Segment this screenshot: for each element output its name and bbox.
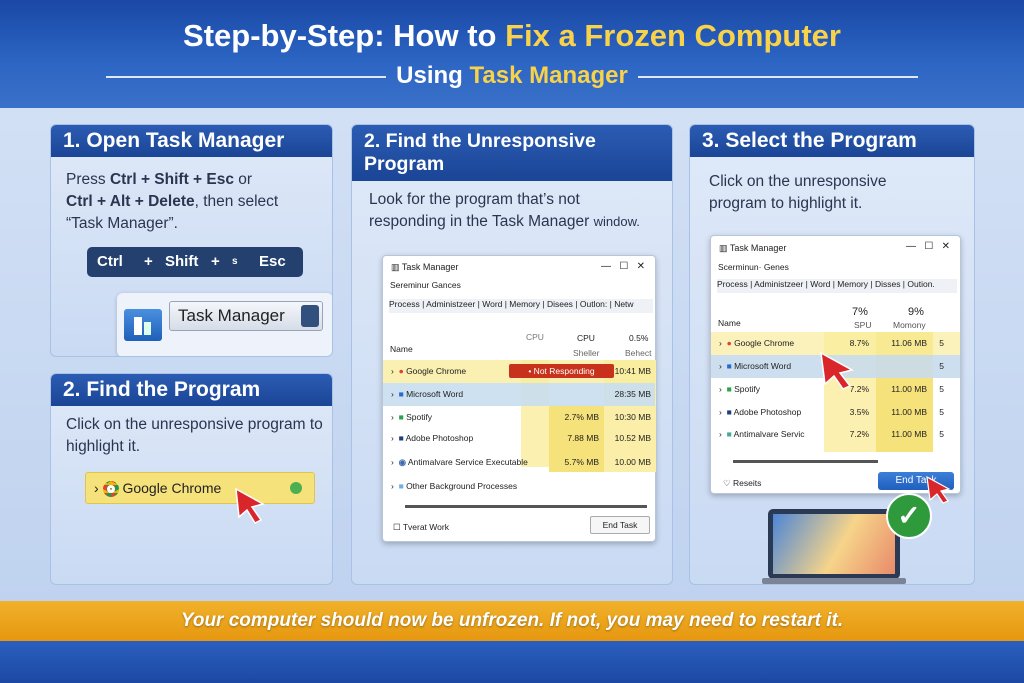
heading 2: 2. Find the Program <box>63 378 260 401</box>
task manager window 2: 7.2% <box>850 429 869 439</box>
task manager window 2: › ■ Antimalvare Servic <box>719 429 804 439</box>
icon: check <box>886 493 932 539</box>
task manager window: Process | Administzeer | Word | Memory | Disees | Outlon: | Netw <box>389 299 634 309</box>
text 1: Ctrl + Alt + Delete, then select <box>66 193 278 210</box>
task manager window 2: 11.00 MB <box>891 429 927 439</box>
task manager window 2: Scerminun· Genes <box>718 262 789 272</box>
task manager window 2: 5 <box>939 429 944 439</box>
task manager window: 10.52 MB <box>615 433 651 443</box>
task manager window 2: 11.00 MB <box>891 407 927 417</box>
task manager window: 10:30 MB <box>615 412 651 422</box>
task manager window: Sereminur Gances <box>390 280 461 290</box>
heading 3: 2. Find the Unresponsive <box>364 130 596 152</box>
bottom band <box>0 641 1024 683</box>
text 1: Press Ctrl + Shift + Esc or <box>66 171 252 188</box>
task manager window: › ● Google Chrome <box>391 366 466 376</box>
icon: check: ✓ <box>897 500 921 531</box>
arrow cursor <box>235 488 265 524</box>
task manager window 2: 9% <box>908 306 924 318</box>
text 2: Click on the unresponsive program to highlight it. <box>66 416 323 455</box>
task manager window 2: ▥ Task Manager <box>719 243 786 253</box>
task manager window 2: 5 <box>939 338 944 348</box>
task manager window: 0.5% <box>629 333 648 343</box>
task manager window: › ■ Spotify <box>391 412 432 422</box>
text 1 <box>66 171 278 232</box>
task manager window 2: — ☐ ✕ <box>906 241 950 252</box>
task manager window: CPU <box>577 333 595 343</box>
keyboard shortcut keys <box>87 247 303 277</box>
heading 1: 1. Open Task Manager <box>63 129 284 152</box>
icon: task manager <box>124 309 162 341</box>
task manager window 2: 5 <box>939 384 944 394</box>
task manager window: 10:41 MB <box>615 366 651 376</box>
heading 2 <box>51 374 332 406</box>
task manager window 2: Name <box>718 318 741 328</box>
task manager window: CPU <box>526 332 544 342</box>
cursor arrows <box>820 352 854 390</box>
task manager window: 7.88 MB <box>567 433 599 443</box>
task manager window: › ■ Other Background Processes <box>391 481 517 491</box>
task manager window 2: ♡ Reseits <box>723 478 761 488</box>
keyboard shortcut keys: + <box>211 253 220 270</box>
task manager window <box>382 255 656 542</box>
text 1: “Task Manager”. <box>66 215 178 232</box>
task manager window 2: Process | Administzeer | Word | Memory | Disses | Oution. <box>717 279 935 289</box>
task manager window: Name <box>390 344 413 354</box>
task manager window: › ◉ Antimalvare Service Executable <box>391 457 528 467</box>
task manager window 2: Momony <box>893 320 926 330</box>
task manager window 2: 3.5% <box>850 407 869 417</box>
keyboard shortcut keys: s <box>232 256 238 267</box>
task manager window: 10.00 MB <box>615 457 651 467</box>
task manager selection callout <box>117 293 333 357</box>
task manager window: — ☐ ✕ <box>601 261 645 272</box>
task manager window: › ■ Microsoft Word <box>391 389 463 399</box>
task manager window: Behect <box>625 348 651 358</box>
heading 4 <box>690 125 974 157</box>
task manager window 2: 7.2% <box>850 384 869 394</box>
dropdown: Task Manager <box>178 306 285 325</box>
task manager window 2: 5 <box>939 407 944 417</box>
panel: find the program <box>50 373 333 585</box>
title: Step-by-Step: How to Fix a Frozen Computer <box>183 18 841 53</box>
task manager window: 28:35 MB <box>615 389 651 399</box>
task manager window 2: 11.00 MB <box>891 384 927 394</box>
task manager window 2: 11.06 MB <box>891 338 927 348</box>
task manager window 2: 8.7% <box>850 338 869 348</box>
task manager window 2: SPU <box>854 320 871 330</box>
text 3: Look for the program that’s not responding in the Task Manager window. <box>369 191 640 230</box>
task manager window 2: › ■ Adobe Photoshop <box>719 407 801 417</box>
task manager window 2: › ■ Microsoft Word <box>719 361 791 371</box>
footer banner <box>0 601 1024 641</box>
panel: select the program <box>689 124 975 585</box>
task manager window: ☐ Tverat Work <box>393 522 449 532</box>
task manager window: › ■ Adobe Photoshop <box>391 433 473 443</box>
task manager window 2 <box>710 235 961 494</box>
panel: find unresponsive program <box>351 124 673 585</box>
keyboard shortcut keys: Ctrl <box>97 253 123 270</box>
task manager window 2: End Task <box>896 475 936 486</box>
task manager window: Sheller <box>573 348 599 358</box>
subtitle: Using Task Manager <box>396 62 628 89</box>
task manager window 2: › ● Google Chrome <box>719 338 794 348</box>
keyboard shortcut keys: Esc <box>259 253 286 270</box>
task manager window 2: 5 <box>939 361 944 371</box>
heading 3 <box>352 125 672 181</box>
task manager window 2: › ■ Spotify <box>719 384 760 394</box>
dropdown <box>169 301 323 331</box>
task manager window 2: 7% <box>852 306 868 318</box>
header band <box>0 0 1024 108</box>
task manager window: 2.7% MB <box>564 412 599 422</box>
keyboard shortcut keys: Shift <box>165 253 198 270</box>
task manager window: ▥ Task Manager <box>391 262 458 272</box>
text 4: Click on the unresponsive program to highlight it. <box>709 173 886 212</box>
chrome highlighted row <box>85 472 315 504</box>
chrome highlighted row: › Google Chrome <box>94 480 221 496</box>
task manager window: 5.7% MB <box>564 457 599 467</box>
heading 1 <box>51 125 332 157</box>
heading 4: 3. Select the Program <box>702 129 917 152</box>
task manager window: • Not Responding <box>528 366 595 376</box>
keyboard shortcut keys: + <box>144 253 153 270</box>
footer banner: Your computer should now be unfrozen. If not, you may need to restart it. <box>181 610 843 631</box>
heading 3: Program <box>364 153 444 175</box>
task manager window: End Task <box>603 520 637 530</box>
icon: laptop <box>762 509 906 584</box>
panel: open task manager <box>50 124 333 357</box>
